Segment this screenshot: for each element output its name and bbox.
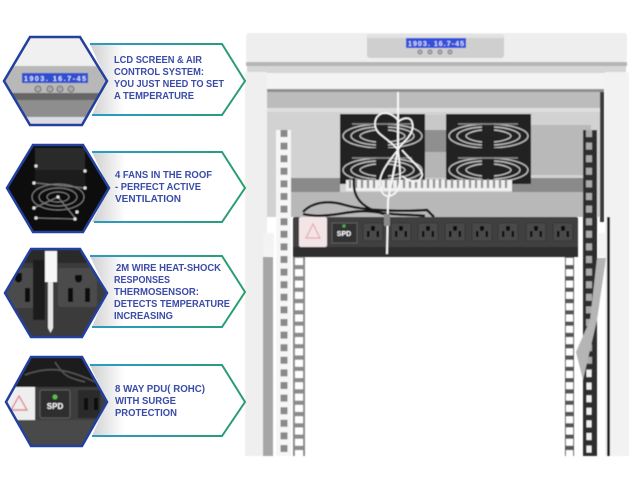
arrow: sensor	[90, 256, 245, 327]
callout text: sensor	[114, 263, 230, 322]
roof fans	[340, 114, 531, 184]
hexagon image: PDU	[8, 358, 106, 445]
callout text: sensor: DETECTS TEMPERATURE	[114, 299, 230, 310]
hexagon image: LCD: 1903. 16.7-45	[24, 76, 86, 83]
white sensor cable	[375, 92, 422, 254]
left rack rail	[263, 130, 305, 456]
callout text: PDU: 8 WAY PDU( ROHC)	[115, 384, 205, 395]
callout text: LCD: A TEMPERATURE	[114, 91, 194, 102]
callout text: sensor: RESPONSES	[114, 275, 170, 286]
callout: PDU	[0, 357, 245, 446]
interior back panel	[267, 89, 604, 217]
outlets	[363, 223, 383, 241]
callout text: LCD: YOU JUST NEED TO SET	[114, 79, 225, 90]
arrow: PDU	[90, 365, 245, 436]
callout text: fans	[115, 170, 212, 205]
PDU power strip	[293, 217, 578, 257]
callout: LCD screen	[0, 37, 245, 125]
callout text: fans: - PERFECT ACTIVE	[115, 182, 201, 193]
callout: fans	[0, 145, 245, 232]
right rack rail	[263, 130, 610, 456]
vent fins	[346, 180, 512, 191]
arrow: LCD	[90, 44, 245, 115]
PDU breaker	[299, 217, 327, 247]
PDU power strip: SPD	[337, 231, 351, 238]
control panel	[367, 34, 504, 58]
callout text: sensor: 2M WIRE HEAT-SHOCK	[116, 263, 221, 274]
callout text: PDU	[115, 384, 205, 419]
callout text: fans: VENTILATION	[115, 194, 181, 205]
hexagon image: PDU: SPD	[47, 402, 63, 411]
control panel LCD	[406, 38, 466, 48]
callout text: fans: 4 FANS IN THE ROOF	[115, 170, 212, 181]
callout text: PDU: PROTECTION	[115, 408, 177, 419]
cabinet side posts	[245, 72, 267, 456]
black power cords	[303, 178, 434, 217]
cabinet roof	[246, 33, 627, 62]
control panel: 1903. 16.7-45	[408, 41, 464, 48]
callout: thermosensor	[0, 249, 245, 337]
hexagon image: LCD	[6, 38, 106, 124]
callout text: LCD	[114, 55, 225, 102]
hexagon image: sensor	[6, 250, 106, 336]
callout text: sensor: THERMOSENSOR:	[114, 287, 199, 298]
callout text: sensor: INCREASING	[114, 311, 173, 322]
callout text: LCD: CONTROL SYSTEM:	[114, 67, 204, 78]
SPD module	[332, 223, 357, 243]
callout text: LCD: LCD SCREEN & AIR	[114, 55, 202, 66]
callout text: PDU: WITH SURGE	[115, 396, 176, 407]
cabinet photo	[245, 33, 629, 456]
hexagon image: fans	[8, 146, 108, 231]
arrow: fans	[92, 152, 245, 222]
